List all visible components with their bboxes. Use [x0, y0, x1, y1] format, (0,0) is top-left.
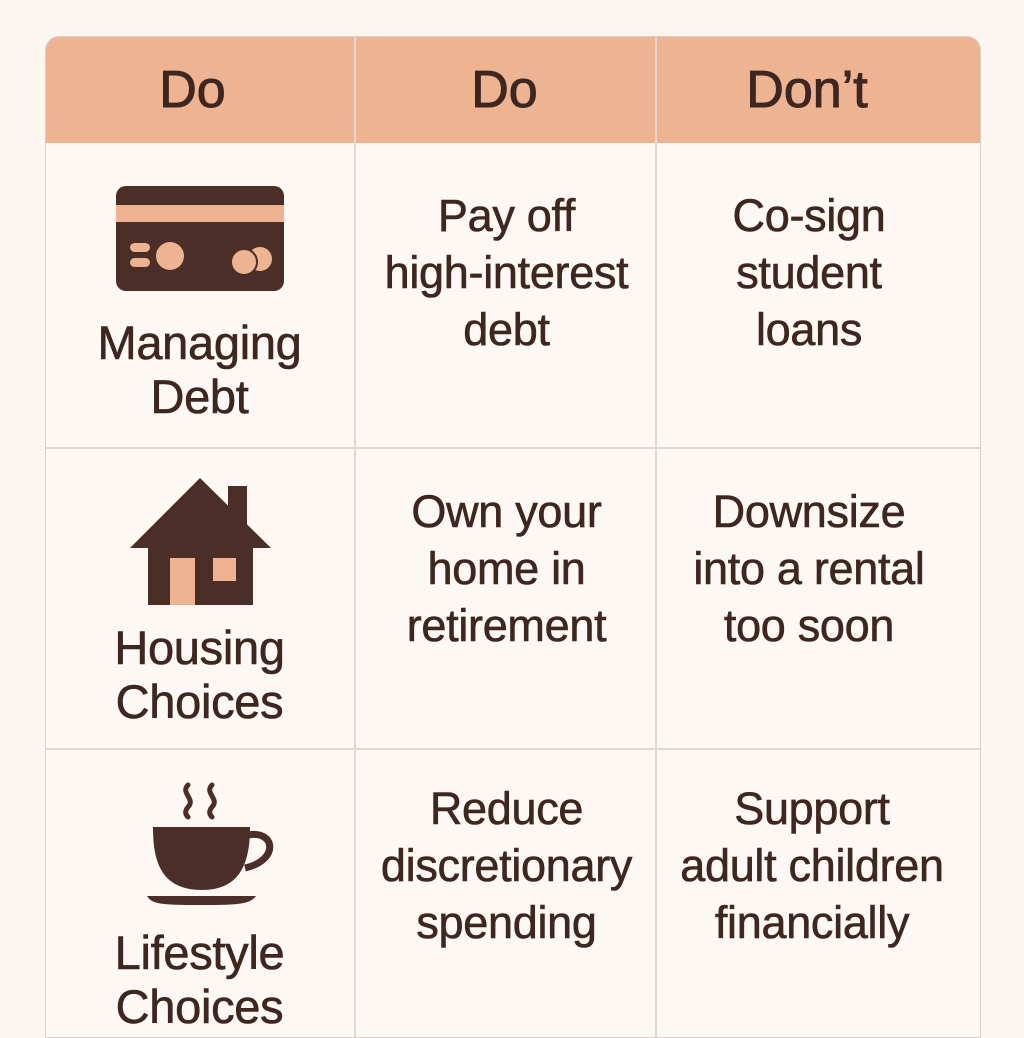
- header: Don't: Don’t: [746, 61, 868, 119]
- icon: credit card: [116, 186, 284, 291]
- cell: own home: Own your: [411, 486, 602, 537]
- label: Housing Choices: Housing: [114, 621, 285, 674]
- cell: support children: adult children: [680, 840, 944, 891]
- cell: downsize: too soon: [724, 600, 894, 651]
- cell: pay off debt: debt: [463, 304, 550, 355]
- label: Managing Debt: [97, 316, 302, 423]
- label: Managing Debt: Debt: [150, 370, 249, 423]
- cell: support children: Support: [734, 783, 890, 834]
- label: Lifestyle Choices: [115, 926, 284, 1033]
- header: Do: Do: [471, 61, 538, 119]
- cell: own home: home in: [428, 543, 586, 594]
- cell: support children: financially: [715, 897, 909, 948]
- cell: reduce spending: spending: [416, 897, 597, 948]
- label: Managing Debt: Managing: [97, 316, 302, 369]
- cell: co-sign: Co-sign: [733, 190, 885, 241]
- cell: pay off debt: [385, 190, 629, 355]
- cell: downsize: [693, 486, 925, 651]
- cell: co-sign: [733, 190, 885, 355]
- cell: reduce spending: [381, 783, 633, 948]
- icon: house: [130, 478, 271, 605]
- cell: reduce spending: Reduce: [430, 783, 583, 834]
- cell: support children: [680, 783, 944, 948]
- cell: downsize: into a rental: [693, 543, 925, 594]
- cell: own home: [407, 486, 607, 651]
- cell: pay off debt: Pay off: [438, 190, 575, 241]
- cell: co-sign: student: [736, 247, 882, 298]
- label: Lifestyle Choices: Lifestyle: [115, 926, 284, 979]
- icon: coffee cup: [147, 782, 274, 905]
- label: Housing Choices: Choices: [116, 675, 283, 728]
- cell: co-sign: loans: [756, 304, 862, 355]
- cell: reduce spending: discretionary: [381, 840, 632, 891]
- cell: downsize: Downsize: [713, 486, 905, 537]
- header bar: [46, 37, 980, 143]
- label: Lifestyle Choices: Choices: [116, 980, 283, 1033]
- cell: pay off debt: high-interest: [385, 247, 628, 298]
- cell: own home: retirement: [407, 600, 606, 651]
- label: Housing Choices: [114, 621, 285, 728]
- header: Do: Do: [159, 61, 226, 119]
